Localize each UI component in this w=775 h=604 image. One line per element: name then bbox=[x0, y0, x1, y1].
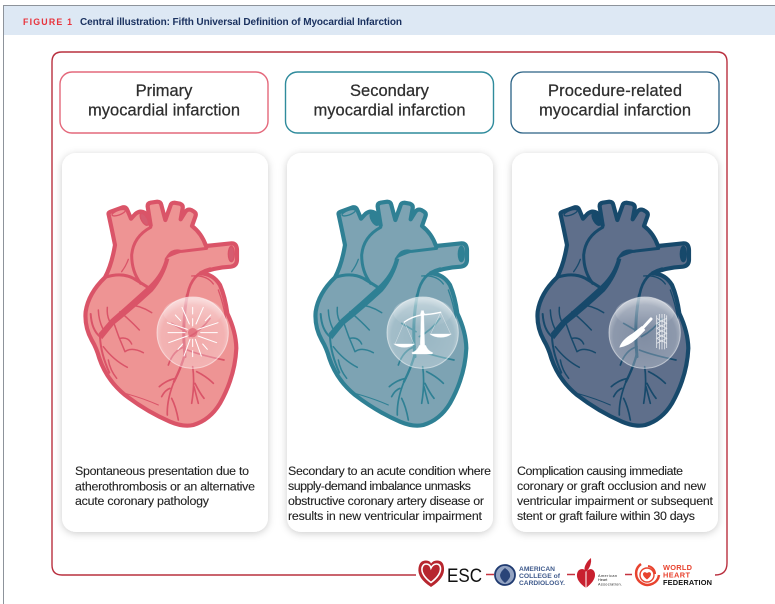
logo: World Heart Federation: WORLD bbox=[663, 563, 693, 572]
logo: American College of Cardiology: CARDIOLOGY. bbox=[519, 580, 565, 587]
logo: American Heart Association bbox=[577, 558, 622, 588]
figure title: FIGURE 1 bbox=[23, 17, 72, 27]
panel: secondary card bbox=[287, 153, 493, 532]
logo: American College of Cardiology: AMERICAN bbox=[519, 566, 555, 573]
logo: American Heart Association: Association. bbox=[598, 582, 622, 586]
procedure description: stent or graft failure within 30 days bbox=[517, 509, 695, 523]
logo: American Heart Association: American bbox=[598, 574, 617, 578]
outer red frame bbox=[52, 52, 727, 575]
procedure description: ventricular impairment or subsequent bbox=[517, 494, 714, 508]
logo: ESC bbox=[418, 560, 482, 587]
logo: World Heart Federation bbox=[636, 563, 712, 587]
procedure description bbox=[517, 464, 714, 523]
panel: secondary heading: myocardial infarction bbox=[314, 102, 466, 120]
logo: American College of Cardiology bbox=[495, 565, 565, 587]
icon: scalpel and stent bbox=[619, 314, 667, 349]
panel: procedure-related heading: myocardial infarction bbox=[539, 102, 691, 120]
logo: ESC: ESC bbox=[447, 565, 482, 587]
panel: secondary heading: Secondary bbox=[350, 82, 430, 100]
panel: primary heading: Primary bbox=[136, 82, 193, 100]
panel: secondary heading bbox=[286, 72, 494, 133]
panel: primary card bbox=[62, 153, 268, 532]
procedure heart illustration bbox=[537, 202, 689, 426]
panel: primary heading bbox=[60, 72, 268, 133]
logo: American College of Cardiology: COLLEGE of bbox=[519, 573, 561, 580]
logo: World Heart Federation: FEDERATION bbox=[663, 578, 712, 587]
primary description: acute coronary pathology bbox=[75, 494, 210, 508]
panel: procedure-related card bbox=[512, 153, 718, 532]
secondary heart illustration bbox=[315, 202, 467, 426]
secondary description: results in new ventricular impairment bbox=[288, 509, 483, 523]
primary heart illustration bbox=[85, 202, 237, 426]
procedure description: Complication causing immediate bbox=[517, 464, 683, 478]
logo: American Heart Association: Heart bbox=[598, 578, 608, 582]
panel: procedure-related heading bbox=[511, 72, 719, 133]
panel: procedure-related heading: Procedure-related bbox=[548, 82, 682, 100]
logo strip bbox=[418, 558, 712, 588]
icon: balance scale bbox=[394, 311, 451, 354]
secondary description: Secondary to an acute condition where bbox=[288, 464, 491, 478]
secondary description bbox=[288, 464, 491, 523]
figure title: Central illustration: Fifth Universal Definition of Myocardial Infarction bbox=[80, 17, 402, 28]
primary description bbox=[75, 464, 255, 508]
logo: World Heart Federation: HEART bbox=[663, 570, 690, 580]
primary description: atherothrombosis or an alternative bbox=[75, 480, 255, 494]
secondary description: supply-demand imbalance unmasks bbox=[288, 479, 471, 493]
secondary description: obstructive coronary artery disease or bbox=[288, 494, 484, 508]
primary description: Spontaneous presentation due to bbox=[75, 464, 249, 478]
panel: primary heading: myocardial infarction bbox=[88, 102, 240, 120]
procedure description: coronary or graft occlusion and new bbox=[517, 479, 706, 493]
